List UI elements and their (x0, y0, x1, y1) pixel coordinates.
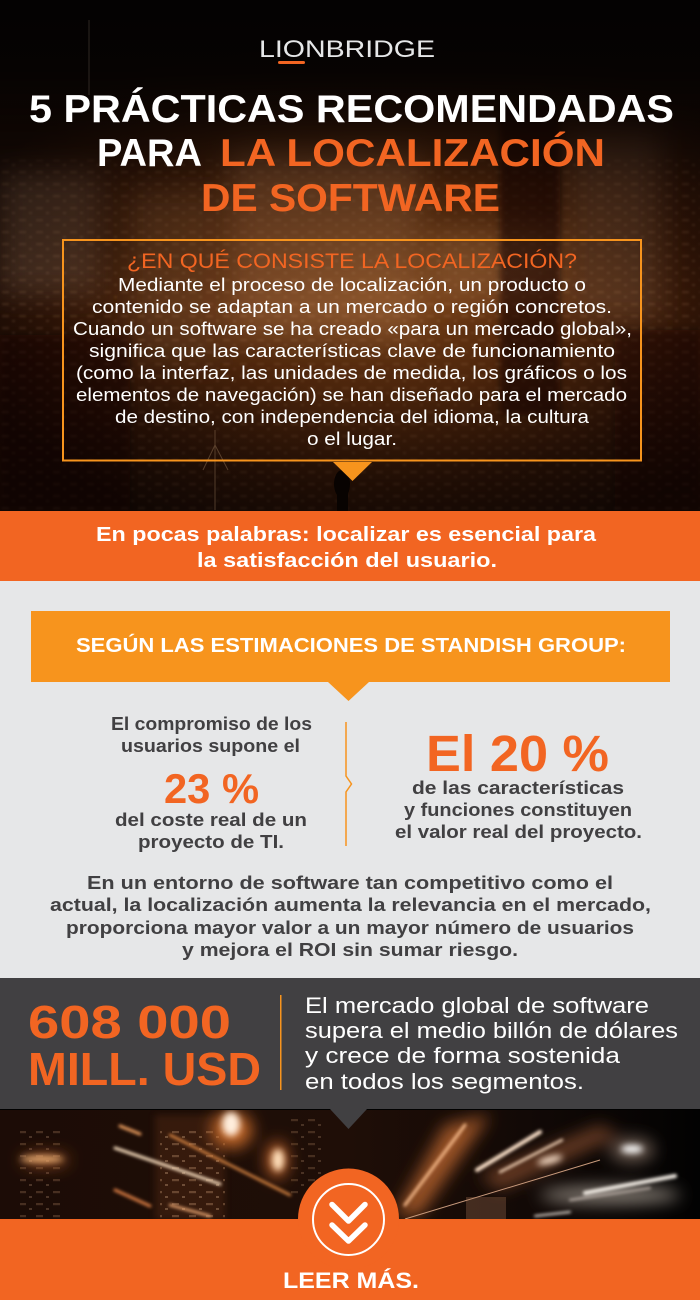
title (29, 87, 674, 220)
heading: question: ¿EN QUÉ CONSISTE LA LOCALIZACIÓN? (127, 250, 577, 273)
heading: Standish Group estimates (31, 611, 670, 701)
image: light streaks (0, 1109, 700, 1220)
text block: competitive environment: y mejora el ROI sin sumar riesgo. (182, 939, 518, 960)
stat: 23 percent: 23 % (164, 765, 259, 812)
stat: 20 percent: el valor real del proyecto. (395, 822, 642, 842)
footer: read more (0, 1168, 700, 1300)
title: PARA (97, 132, 202, 175)
icon: double chevron (313, 1184, 384, 1255)
stat: 23 percent: del coste real de un (115, 810, 307, 830)
text block: market description: supera el medio billón de dólares (305, 1018, 678, 1043)
panel: light grey statistics section (0, 581, 700, 978)
text block: market description: El mercado global de software (305, 993, 649, 1018)
logo: Lionbridge: LIONBRIDGE (259, 36, 435, 63)
text block: definition: significa que las características clave de funcionamiento (89, 341, 615, 361)
stat: 23 percent: usuarios supone el (121, 736, 300, 756)
stat: 23 percent: El compromiso de los (111, 714, 312, 734)
text block: definition: Cuando un software se ha creado «para un mercado global», (73, 319, 632, 339)
title: DE SOFTWARE (201, 177, 500, 220)
text block: competitive environment: En un entorno de software tan competitivo como el (87, 872, 613, 893)
text block: competitive environment (50, 872, 651, 960)
text block: definition: Mediante el proceso de localización, un producto o (118, 275, 586, 295)
stat: market value: MILL. USD (28, 1043, 261, 1095)
panel: global software market (0, 978, 700, 1109)
stat: market value (28, 996, 261, 1095)
text block: definition: o el lugar. (307, 429, 397, 449)
divider (346, 722, 352, 846)
title: LA LOCALIZACIÓN (220, 131, 605, 175)
text block: definition: (como la interfaz, las unidades de medida, los gráficos o los (76, 363, 627, 383)
banner: in short: En pocas palabras: localizar es esencial para (96, 524, 597, 546)
title: 5 PRÁCTICAS RECOMENDADAS (29, 87, 674, 131)
stat: 20 percent (395, 725, 642, 842)
background: dark city skyline (0, 0, 700, 511)
stat: 20 percent: El 20 % (426, 725, 609, 782)
text block: market description: en todos los segmentos. (305, 1069, 584, 1094)
arrow: market panel pointer (330, 1109, 367, 1129)
text block: definition: elementos de navegación) se han diseñado para el mercado (76, 385, 627, 405)
stat: market value: 608 000 (28, 996, 231, 1048)
text block: competitive environment: actual, la localización aumenta la relevancia en el mercado, (50, 894, 651, 915)
heading: Standish Group estimates: SEGÚN LAS ESTIMACIONES DE STANDISH GROUP: (76, 633, 626, 657)
panel: what is localization (63, 240, 641, 460)
stat: 20 percent: de las características (412, 778, 624, 798)
stat: 20 percent: y funciones constituyen (404, 800, 632, 820)
banner: in short: la satisfacción del usuario. (197, 550, 497, 572)
text block: definition: de destino, con independencia del idioma, la cultura (115, 407, 590, 427)
text block: market description (305, 993, 678, 1094)
stat: 23 percent: proyecto de TI. (138, 832, 284, 852)
arrow: panel pointer (333, 462, 372, 481)
text block: competitive environment: proporciona mayor valor a un mayor número de usuarios (66, 917, 634, 938)
text block: definition: contenido se adaptan a un mercado o región concretos. (92, 297, 612, 317)
call to action: LEER MÁS. (283, 1268, 419, 1293)
stat: 23 percent (111, 714, 312, 852)
text block: definition (73, 275, 632, 449)
banner: in short (0, 511, 700, 581)
text block: market description: y crece de forma sostenida (305, 1043, 621, 1068)
